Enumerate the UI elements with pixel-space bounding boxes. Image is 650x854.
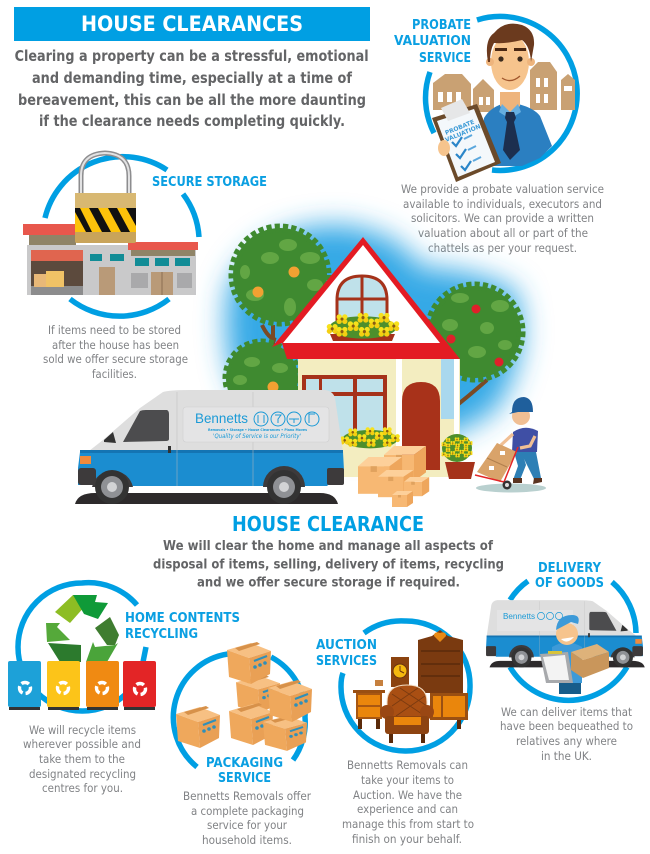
heading <box>206 755 283 786</box>
van livery panel <box>183 407 329 442</box>
man in shirt and tie <box>478 24 552 166</box>
intro text: and demanding time, especially at a time of <box>32 69 352 87</box>
heading: SERVICE <box>419 50 471 66</box>
panel: secure storage <box>23 153 267 381</box>
blue sky glow <box>226 225 522 448</box>
title: HOUSE CLEARANCES <box>81 12 303 36</box>
section intro: and we offer secure storage if required. <box>197 574 460 590</box>
description <box>342 758 474 846</box>
icon ring <box>173 654 305 767</box>
icon ring <box>510 581 636 700</box>
heading: RECYCLING <box>125 626 198 642</box>
section intro <box>153 538 504 590</box>
description: take your items to <box>361 773 454 787</box>
description: chattels as per your request. <box>428 241 577 255</box>
description: If items need to be stored <box>48 323 181 337</box>
intro text: Clearing a property can be a stressful, emotional <box>15 47 369 65</box>
buildings illustration <box>433 62 575 112</box>
heading: OF GOODS <box>535 575 604 591</box>
clipboard <box>432 99 501 182</box>
icon ring <box>45 157 199 316</box>
van livery panel: Bennetts <box>195 410 248 426</box>
heading: SERVICE <box>218 770 271 786</box>
side table <box>353 680 385 729</box>
van livery panel: 'Quality of Service is our Priority' <box>213 433 301 440</box>
warehouse <box>23 224 198 295</box>
description: have been bequeathed to <box>500 719 633 733</box>
small front tree <box>226 342 298 414</box>
intro text: bereavement, this can be all the more daunting <box>18 91 366 109</box>
panel: home contents recycling <box>8 583 240 795</box>
section intro: We will clear the home and manage all aspects of <box>163 538 493 554</box>
description: designated recycling <box>29 767 136 781</box>
right apple tree <box>429 286 521 437</box>
description: after the house has been <box>52 338 179 352</box>
heading: SECURE STORAGE <box>152 174 267 190</box>
description <box>23 723 141 795</box>
description <box>500 705 633 763</box>
description: Bennetts Removals offer <box>183 789 311 803</box>
description: sold we offer secure storage <box>43 352 188 366</box>
description: Auction. We have the <box>353 788 462 802</box>
description: relatives any where <box>516 734 617 748</box>
delivery van <box>486 600 645 667</box>
description: centres for you. <box>42 781 123 795</box>
van livery panel: Removals • Storage • House Clearances • Piano Moves <box>208 428 307 432</box>
description: We can deliver items that <box>501 705 632 719</box>
heading <box>535 560 604 591</box>
description: valuation about all or part of the <box>418 226 588 240</box>
icon: padlock <box>75 153 136 243</box>
description: Bennetts Removals can <box>347 758 468 772</box>
title bar <box>14 7 370 41</box>
heading: PACKAGING <box>206 755 283 771</box>
panel: probate valuation service <box>394 16 604 255</box>
grandfather clock <box>391 657 409 687</box>
house <box>272 237 460 477</box>
description <box>43 323 188 381</box>
description <box>183 789 311 847</box>
icon: recycling arrows <box>46 595 119 662</box>
courier with parcel <box>540 615 609 694</box>
description: service for your <box>207 818 287 832</box>
intro text: if the clearance needs completing quickly. <box>39 112 345 130</box>
description: household items. <box>202 833 292 847</box>
description: in the UK. <box>541 749 592 763</box>
description: a complete packaging <box>191 804 304 818</box>
description: experience and can <box>357 802 458 816</box>
moving boxes <box>358 446 429 507</box>
left apple tree <box>233 228 327 345</box>
heading: SERVICES <box>316 653 377 669</box>
heading <box>125 610 240 642</box>
description: take them to the <box>39 752 125 766</box>
clipboard: VALUATION <box>444 123 482 144</box>
attic window <box>327 276 399 341</box>
heading <box>394 17 471 66</box>
delivery man with hand truck <box>475 397 546 492</box>
main house scene <box>75 225 546 507</box>
description: wherever possible and <box>23 737 141 751</box>
heading: DELIVERY <box>538 560 601 576</box>
heading <box>316 637 377 669</box>
icon ring <box>341 621 470 751</box>
description: facilities. <box>92 367 137 381</box>
armchair <box>380 685 434 743</box>
description <box>401 182 604 255</box>
description: manage this from start to <box>342 817 474 831</box>
panel: delivery of goods <box>486 560 645 763</box>
antique furniture <box>353 630 468 743</box>
description: We will recycle items <box>29 723 136 737</box>
heading: HOME CONTENTS <box>125 610 240 626</box>
section heading: HOUSE CLEARANCE <box>232 512 424 536</box>
heading: AUCTION <box>316 637 377 653</box>
recycling bins <box>8 661 156 710</box>
description: solicitors. We can provide a written <box>411 211 594 225</box>
delivery van: Bennetts <box>503 612 535 621</box>
panel: packaging service <box>173 642 312 847</box>
delivery van <box>75 390 344 504</box>
icon ring <box>18 583 146 711</box>
description: We provide a probate valuation service <box>401 182 604 196</box>
icon ring <box>426 16 577 170</box>
description: finish on your behalf. <box>352 832 462 846</box>
section intro: disposal of items, selling, delivery of items, recycling <box>153 556 504 572</box>
flower pot <box>441 434 475 479</box>
cardboard boxes <box>176 642 312 751</box>
clipboard: PROBATE <box>444 119 476 137</box>
heading: PROBATE <box>412 17 471 33</box>
intro text <box>15 47 369 130</box>
heading: VALUATION <box>394 33 471 49</box>
panel: auction services <box>316 621 474 846</box>
description: available to individuals, executors and <box>403 197 602 211</box>
dresser <box>418 630 468 729</box>
